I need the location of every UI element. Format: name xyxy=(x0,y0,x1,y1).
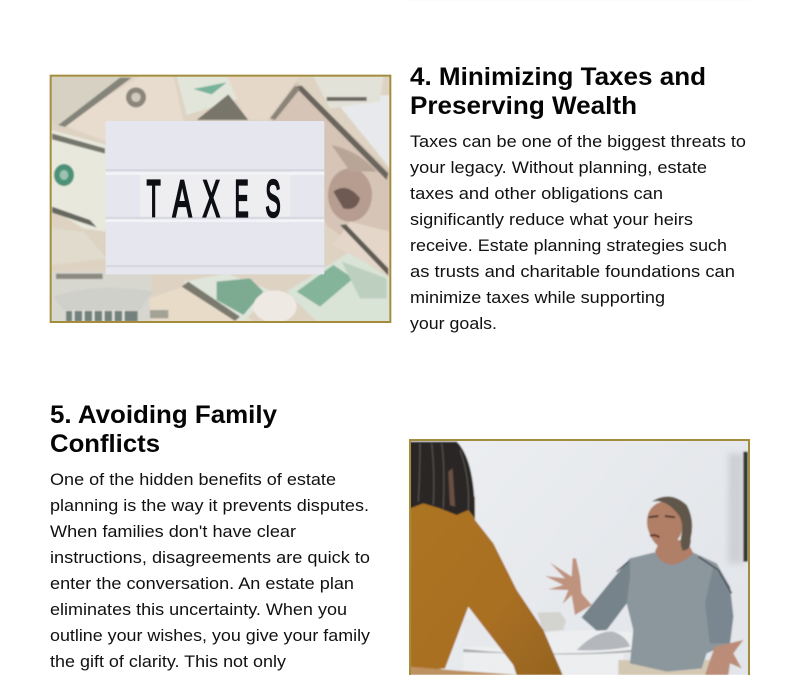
text block: section 4 xyxy=(410,133,746,333)
heading: section 5: 5. Avoiding Family xyxy=(50,401,277,429)
heading: section 5 xyxy=(50,401,277,458)
text block: section 4: taxes and other obligations can xyxy=(410,185,663,203)
man: hair xyxy=(410,442,475,518)
TAXES lightbox xyxy=(106,121,324,274)
lightbox lettering: A xyxy=(173,171,192,229)
lightbox lettering: X xyxy=(203,171,220,229)
text block: section 5: the gift of clarity. This not only xyxy=(50,653,287,671)
heading: section 4: 4. Minimizing Taxes and xyxy=(410,63,706,91)
text block: section 5: When families don't have clear xyxy=(50,523,297,541)
text block: section 4: significantly reduce what your heirs xyxy=(410,211,693,229)
text block: section 5: One of the hidden benefits of estate xyxy=(50,471,336,489)
text block: section 4: as trusts and charitable foundations can xyxy=(410,263,735,281)
lightbox lettering: T xyxy=(147,171,161,229)
text block: section 5 xyxy=(50,471,371,671)
text block: section 5: planning is the way it prevents disputes. xyxy=(50,497,369,515)
text block: section 4: Taxes can be one of the biggest threats to xyxy=(410,133,746,151)
text block: section 4: minimize taxes while supporting xyxy=(410,289,665,307)
photo: TAXES lightbox on banknotes xyxy=(51,76,390,323)
text block: section 5: enter the conversation. An estate plan xyxy=(50,575,354,593)
heading: section 4: Preserving Wealth xyxy=(410,92,637,120)
faint top image edge xyxy=(408,0,750,1)
woman: sweater xyxy=(626,552,730,672)
table xyxy=(606,658,619,674)
text block: section 5: eliminates this uncertainty. When you xyxy=(50,601,347,619)
heading: section 5: Conflicts xyxy=(50,430,160,458)
heading: section 4 xyxy=(410,63,706,120)
woman: neck and face xyxy=(655,540,693,565)
TAXES lightbox: S xyxy=(265,171,281,229)
text block: section 4: your goals. xyxy=(410,315,497,333)
lightbox lettering xyxy=(146,178,280,218)
woman: raised hand xyxy=(545,558,592,615)
man: sweater xyxy=(410,497,563,675)
text block: section 5: instructions, disagreements are quick to xyxy=(50,549,370,567)
woman: lower hand xyxy=(705,640,743,675)
text block: section 4: your legacy. Without planning, estate xyxy=(410,159,707,177)
text block: section 4: receive. Estate planning strategies such xyxy=(410,237,727,255)
lightbox lettering: E xyxy=(235,171,249,229)
photo: two people in a tense conversation xyxy=(410,440,749,675)
woman: trousers xyxy=(618,660,710,675)
text block: section 5: outline your wishes, you give your family xyxy=(50,627,371,645)
